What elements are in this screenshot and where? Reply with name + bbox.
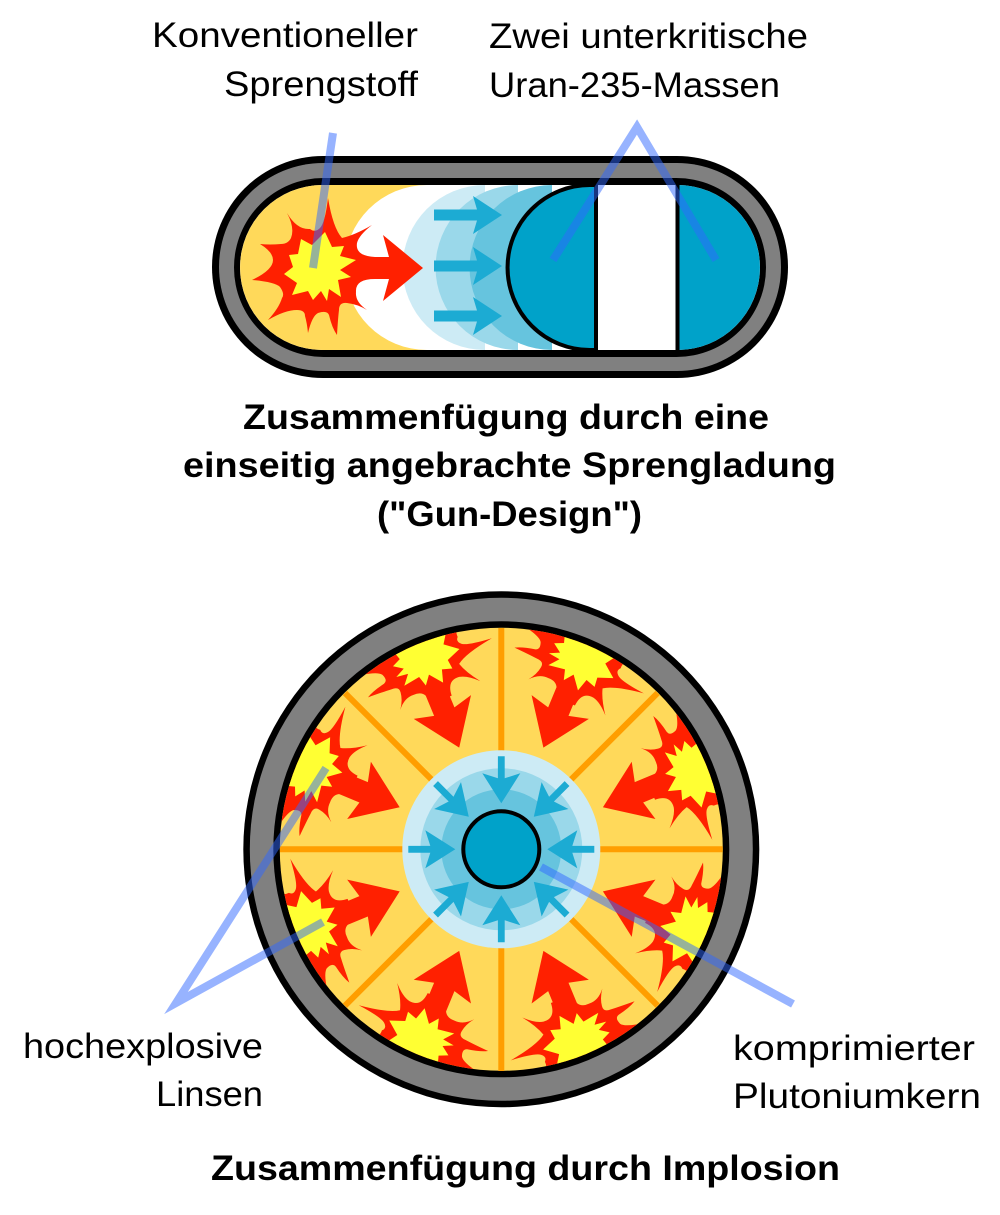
white shock front — [345, 185, 440, 350]
label: two subcritical masses: Zwei unterkritische — [489, 17, 808, 56]
panel: gun design capsule — [212, 156, 788, 378]
pointer: lenses — [176, 768, 326, 1003]
pointer: explosive — [313, 133, 333, 268]
label: conventional explosive: Sprengstoff — [224, 65, 418, 104]
explosion burst — [252, 198, 375, 335]
plutonium core — [463, 811, 539, 887]
heading: gun design: einseitig angebrachte Sprengladung — [183, 446, 836, 485]
panel: implosion sphere — [234, 582, 769, 1117]
label: plutonium core: Plutoniumkern — [733, 1077, 981, 1116]
pointer: plutonium core — [541, 867, 793, 1004]
uranium mass left — [508, 185, 596, 350]
label: conventional explosive — [152, 16, 418, 104]
inward arrows — [408, 756, 594, 942]
blue arrows — [434, 196, 502, 335]
heading: gun design — [183, 398, 836, 534]
label: plutonium core: komprimierter — [733, 1029, 975, 1068]
red arrow — [365, 235, 423, 301]
shock crescent light — [403, 185, 485, 350]
lens dividers — [280, 628, 723, 1071]
label: lenses: Linsen — [156, 1075, 263, 1114]
shock crescent mid — [436, 185, 518, 350]
heading: gun design: Zusammenfügung durch eine — [243, 398, 769, 437]
label: conventional explosive: Konventioneller — [152, 16, 418, 55]
label: plutonium core — [733, 1029, 981, 1116]
explosive lenses — [234, 582, 769, 1117]
label: lenses: hochexplosive — [23, 1027, 263, 1066]
label: lenses — [23, 1027, 263, 1114]
shock crescent dark — [470, 185, 552, 350]
explosive fill — [240, 185, 432, 350]
explosion core — [284, 232, 356, 301]
pointer: uranium masses — [553, 127, 716, 260]
heading: gun design: ("Gun-Design") — [377, 495, 642, 534]
uranium mass right edge — [676, 185, 680, 350]
compression rings — [402, 750, 600, 948]
heading: implosion: Zusammenfügung durch Implosion — [211, 1149, 840, 1188]
label: two subcritical masses: Uran-235-Massen — [489, 66, 780, 105]
uranium mass right — [678, 185, 760, 350]
label: two subcritical masses — [489, 17, 808, 105]
